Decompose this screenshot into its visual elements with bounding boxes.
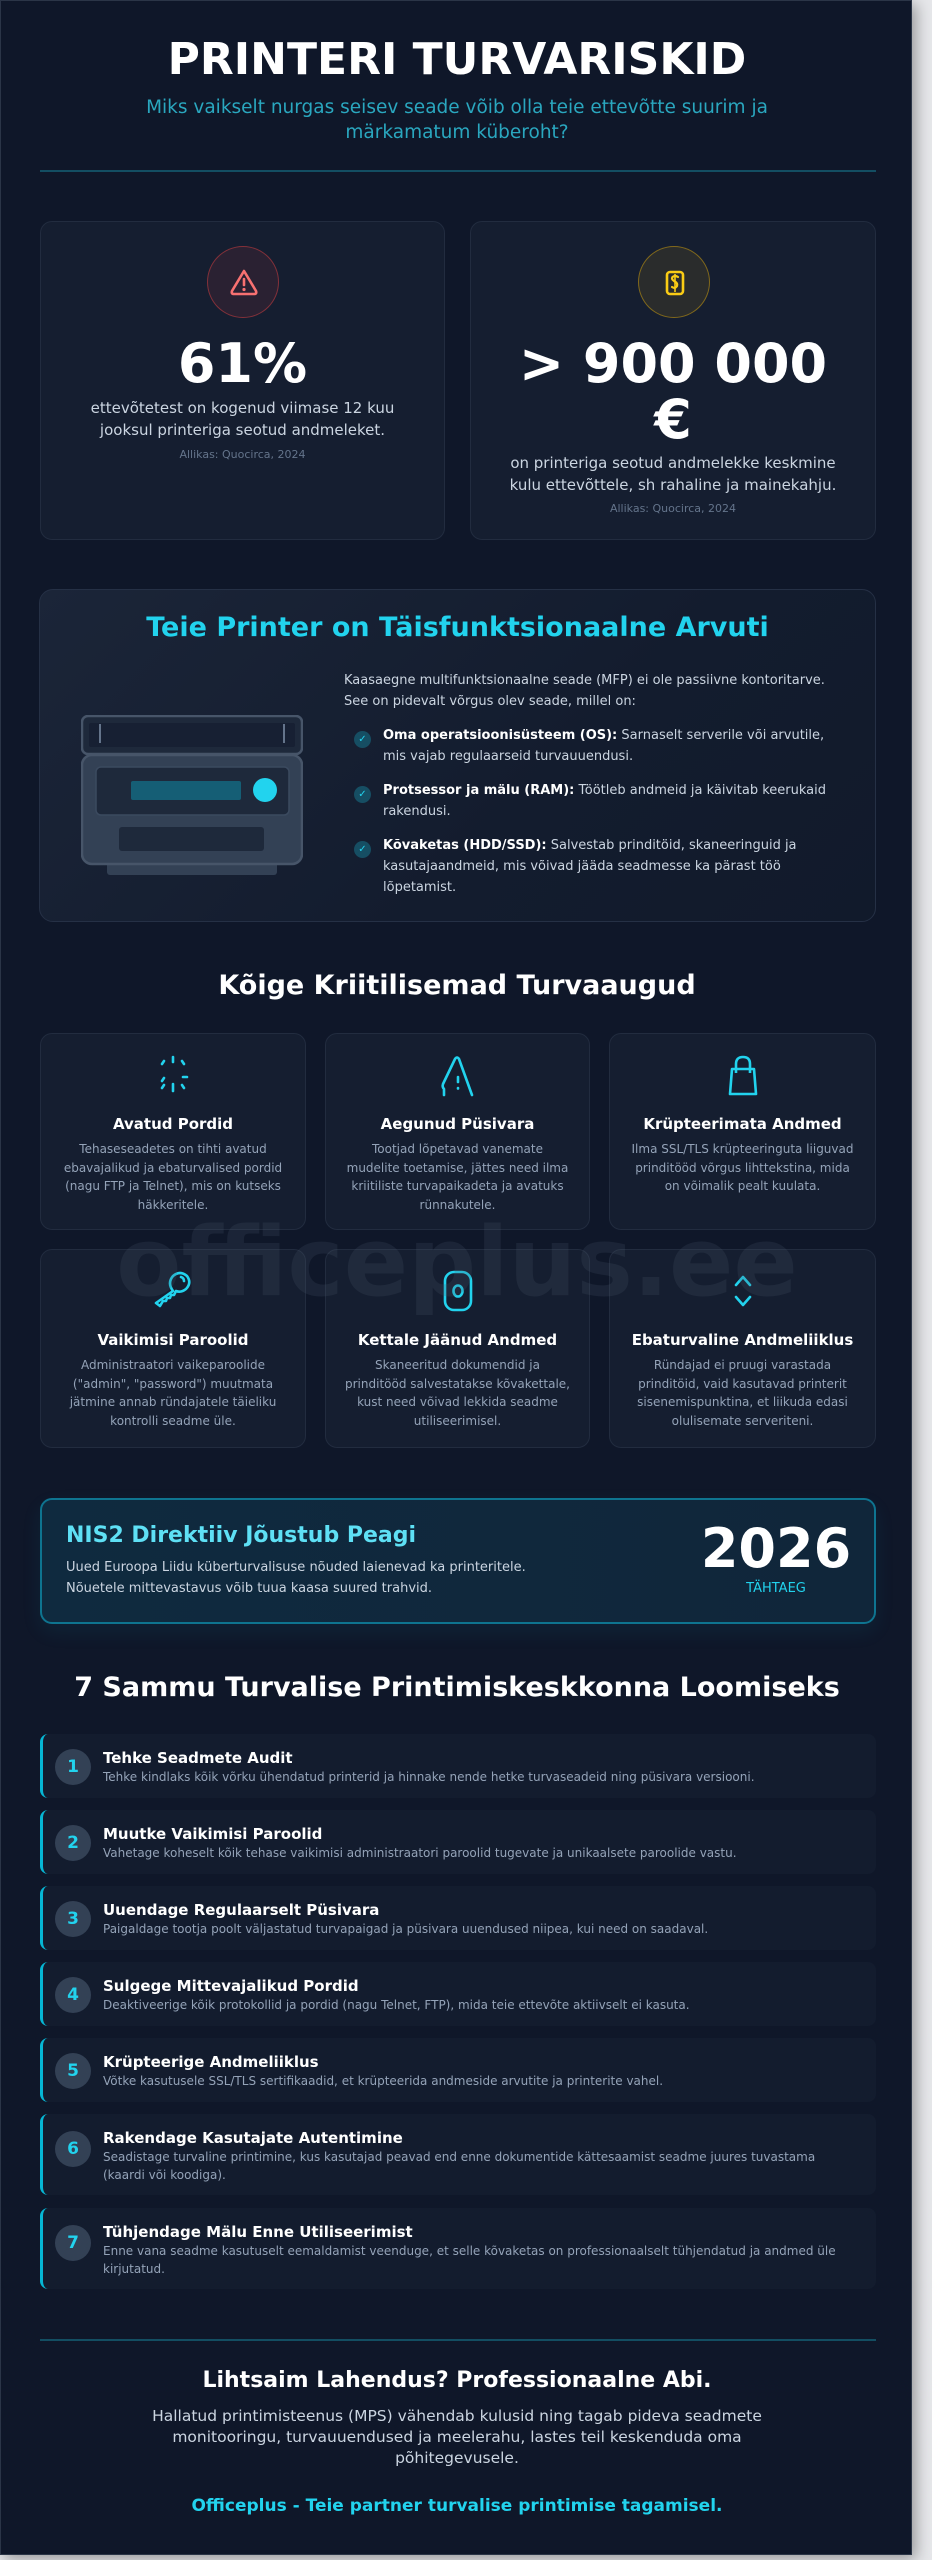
stat text: ettevõtetest on kogenud viimase 12 kuu: [91, 399, 394, 417]
icon: spinner: [160, 1056, 188, 1092]
step 7: Enne vana seadme kasutuselt eemaldamist veenduge, et selle kõvaketas on professionaalselt tühjendatud ja andmed üle: [103, 2244, 836, 2258]
card: insecure traffic: Ebaturvaline Andmeliiklus: [632, 1331, 853, 1349]
step 2: Muutke Vaikimisi Paroolid: [103, 1825, 322, 1843]
icon: warning: [207, 246, 279, 318]
icon: key: [154, 1272, 191, 1308]
step 1: Tehke Seadmete Audit: [103, 1749, 293, 1767]
icon: alert road: [441, 1056, 474, 1096]
step 4: Sulgege Mittevajalikud Pordid: [103, 1977, 359, 1995]
bullet: HDD: kasutajaandmeid, mis võivad jääda seadmesse ka pärast töö: [383, 859, 781, 874]
card: insecure traffic: Ründajad ei pruugi varastada: [654, 1358, 831, 1372]
card: default passwords: jätmine annab ründajatele täieliku: [70, 1395, 276, 1409]
card: unencrypted data: Ilma SSL/TLS krüpteeringuta liiguvad: [632, 1142, 853, 1156]
stat number: 61%: [178, 332, 307, 395]
step 3: Paigaldage tootja poolt väljastatud turvapaigad ja püsivara uuendused niipea, kui need on saadaval.: [103, 1922, 708, 1936]
panel: stat 61%: [40, 221, 445, 540]
heading: 7 steps: 7 Sammu Turvalise Printimiskeskkonna Loomiseks: [74, 1672, 840, 1703]
source: Allikas: Quocirca, 2024: [610, 502, 736, 515]
intro: [344, 673, 825, 709]
icon: chevrons: [734, 1276, 752, 1306]
bullet: OS: mis vajab regulaarseid turvauuendusi.: [383, 749, 633, 764]
text block: ✓: [358, 734, 367, 745]
step 1: 1: [67, 1757, 79, 1777]
step 1: [40, 1734, 876, 1798]
callout text: Uued Euroopa Liidu küberturvalisuse nõuded laienevad ka printeritele.: [66, 1560, 526, 1575]
step 7: kirjutatud.: [103, 2262, 165, 2276]
card: default passwords: kontrolli seadme üle.: [110, 1414, 236, 1428]
bullet: RAM: rakendusi.: [383, 804, 451, 819]
heading: Teie Printer on Täisfunktsionaalne Arvuti: [146, 612, 769, 643]
card: insecure traffic: olulisemate serveriteni.: [672, 1414, 813, 1428]
subtitle: Miks vaikselt nurgas seisev seade võib olla teie ettevõtte suurim ja: [146, 97, 768, 118]
card: open ports: [40, 1033, 306, 1230]
card: data on disk: prinditööd salvestatakse kõvakettale,: [345, 1376, 570, 1390]
step 6: [40, 2114, 876, 2195]
intro: Kaasaegne multifunktsionaalne seade (MFP) ei ole passiivne kontoritarve.: [344, 673, 825, 688]
subtitle: märkamatum küberoht?: [345, 122, 569, 143]
icon: open lock bag: [728, 1056, 758, 1096]
callout text: Nõuetele mittevastavus võib tuua kaasa suured trahvid.: [66, 1581, 432, 1596]
stat number: [519, 332, 827, 451]
step 7: 7: [67, 2233, 79, 2253]
card: outdated firmware: Tootjad lõpetavad vanemate: [372, 1142, 543, 1156]
footer text: monitooringu, turvauuendused ja meelerahu, lastes teil keskenduda oma: [172, 2428, 742, 2446]
step 5: Võtke kasutusele SSL/TLS sertifikaadid, et krüpteerida andmeside arvutite ja printerite vahel.: [103, 2074, 663, 2088]
card: open ports: (nagu FTP ja Telnet), mis on kutseks: [65, 1179, 281, 1193]
step 4: 4: [67, 1985, 79, 2005]
panel: stat 900000: [470, 221, 876, 540]
callout heading: NIS2 Direktiiv Jõustub Peagi: [66, 1523, 416, 1548]
heading: critical vulnerabilities: Kõige Kriitilisemad Turvaaugud: [218, 970, 696, 1001]
stat number: €: [654, 388, 692, 451]
card: outdated firmware: mudelite toetamise, jättes need ilma: [347, 1160, 568, 1174]
step 6: Seadistage turvaline printimine, kus kasutajad peavad end enne dokumentide kättesaamist seadme juures tuvastama: [103, 2150, 815, 2164]
card: default passwords: Administraatori vaikeparoolide: [81, 1358, 265, 1372]
stat text: [510, 454, 836, 494]
card: open ports: häkkeritele.: [138, 1198, 208, 1212]
stat text: kulu ettevõttele, sh rahaline ja mainekahju.: [510, 476, 836, 494]
card: insecure traffic: prinditöid, vaid kasutavad printerit: [638, 1376, 847, 1390]
deadline: TÄHTAEG: [746, 1581, 806, 1596]
title: PRINTERI TURVARISKID: [168, 34, 746, 85]
footer text: Hallatud printimisteenus (MPS) vähendab kulusid ning tagab pideva seadmete: [152, 2407, 762, 2425]
step 4: Deaktiveerige kõik protokollid ja pordid (nagu Telnet, FTP), mida teie ettevõte aktiivselt ei kasuta.: [103, 1998, 690, 2012]
footer text: põhitegevusele.: [395, 2449, 519, 2467]
source: Allikas: Quocirca, 2024: [179, 448, 306, 461]
deadline: 2026: [701, 1517, 851, 1580]
card: data on disk: [325, 1249, 590, 1448]
step 5: Krüpteerige Andmeliiklus: [103, 2053, 319, 2071]
card: default passwords: ("admin", "password") muutmata: [73, 1376, 273, 1390]
card: unencrypted data: on võimalik pealt kuulata.: [665, 1179, 820, 1193]
bullet: HDD: Kõvaketas (HDD/SSD): Salvestab prinditöid, skaneeringuid ja: [383, 838, 797, 853]
step 2: [40, 1810, 876, 1874]
card: outdated firmware: Aegunud Püsivara: [381, 1115, 534, 1133]
bullet: RAM: Protsessor ja mälu (RAM): Töötleb andmeid ja käivitab keerukaid: [383, 783, 826, 798]
step 7: [40, 2208, 876, 2289]
intro: See on pidevalt võrgus olev seade, millel on:: [344, 694, 636, 709]
card: open ports: Tehaseseadetes on tihti avatud: [79, 1142, 267, 1156]
footer text: [152, 2407, 762, 2467]
card: outdated firmware: kriitiliste turvapaikadeta ja avatuks: [351, 1179, 564, 1193]
panel: printer is a computer: [39, 589, 876, 922]
text block: ✓: [358, 844, 367, 855]
step 2: Vahetage koheselt kõik tehase vaikimisi administraatori paroolid tugevate ja unikaalsete paroolide vastu.: [103, 1846, 737, 1860]
card: data on disk: Kettale Jäänud Andmed: [358, 1331, 557, 1349]
step 5: [40, 2038, 876, 2102]
step 6: 6: [67, 2139, 79, 2159]
card: default passwords: Vaikimisi Paroolid: [98, 1331, 248, 1349]
subtitle: [146, 97, 768, 143]
card: unencrypted data: prinditööd võrgus lihttekstina, mida: [635, 1160, 850, 1174]
bullet: OS: Oma operatsioonisüsteem (OS): Sarnaselt serverile või arvutile,: [383, 728, 824, 743]
text block: [344, 673, 826, 895]
card: data on disk: kust need võivad lekkida seadme: [357, 1395, 558, 1409]
stat number: > 900 000: [519, 332, 827, 395]
bullet: HDD: [354, 838, 797, 895]
step 2: 2: [67, 1833, 79, 1853]
step 6: Rakendage Kasutajate Autentimine: [103, 2129, 403, 2147]
card: data on disk: Skaneeritud dokumendid ja: [375, 1358, 540, 1372]
card: outdated firmware: [325, 1033, 590, 1230]
step 6: (kaardi või koodiga).: [103, 2168, 226, 2182]
tagline: Officeplus - Teie partner turvalise printimise tagamisel.: [191, 2496, 722, 2516]
card: data on disk: utiliseerimisel.: [414, 1414, 501, 1428]
step 7: Tühjendage Mälu Enne Utiliseerimist: [103, 2223, 413, 2241]
bullet: OS: [354, 728, 824, 764]
stat text: jooksul printeriga seotud andmeleket.: [100, 420, 385, 438]
card: outdated firmware: rünnakutele.: [420, 1198, 495, 1212]
stat text: on printeriga seotud andmelekke keskmine: [510, 454, 836, 472]
card: unencrypted data: [609, 1033, 876, 1230]
step 3: Uuendage Regulaarselt Püsivara: [103, 1901, 379, 1919]
bullet: RAM: [354, 783, 826, 819]
card: open ports: ebavajalikud ja ebaturvalised pordid: [64, 1160, 282, 1174]
card: insecure traffic: [609, 1249, 876, 1448]
card: unencrypted data: Krüpteerimata Andmed: [643, 1115, 842, 1133]
step 4: [40, 1962, 876, 2026]
card: open ports: Avatud Pordid: [113, 1115, 233, 1133]
footer heading: Lihtsaim Lahendus? Professionaalne Abi.: [202, 2368, 712, 2393]
bullet: HDD: lõpetamist.: [383, 880, 456, 895]
icon: money: [638, 246, 710, 318]
callout: NIS2: [40, 1498, 876, 1624]
watermark: officeplus.ee: [116, 1208, 798, 1318]
step 5: 5: [67, 2061, 79, 2081]
text block: ✓: [358, 789, 367, 800]
card: insecure traffic: sisenemispunktina, et liikuda edasi: [637, 1395, 848, 1409]
stat text: [91, 399, 394, 438]
step 3: [40, 1886, 876, 1950]
step 1: Tehke kindlaks kõik võrku ühendatud printerid ja hinnake nende hetke turvaseadeid ning püsivara versiooni.: [103, 1770, 755, 1784]
step 3: 3: [67, 1909, 79, 1929]
icon: disk: [444, 1270, 472, 1312]
callout text: [66, 1560, 526, 1596]
card: default passwords: [40, 1249, 306, 1448]
illustration: printer: [81, 715, 303, 875]
